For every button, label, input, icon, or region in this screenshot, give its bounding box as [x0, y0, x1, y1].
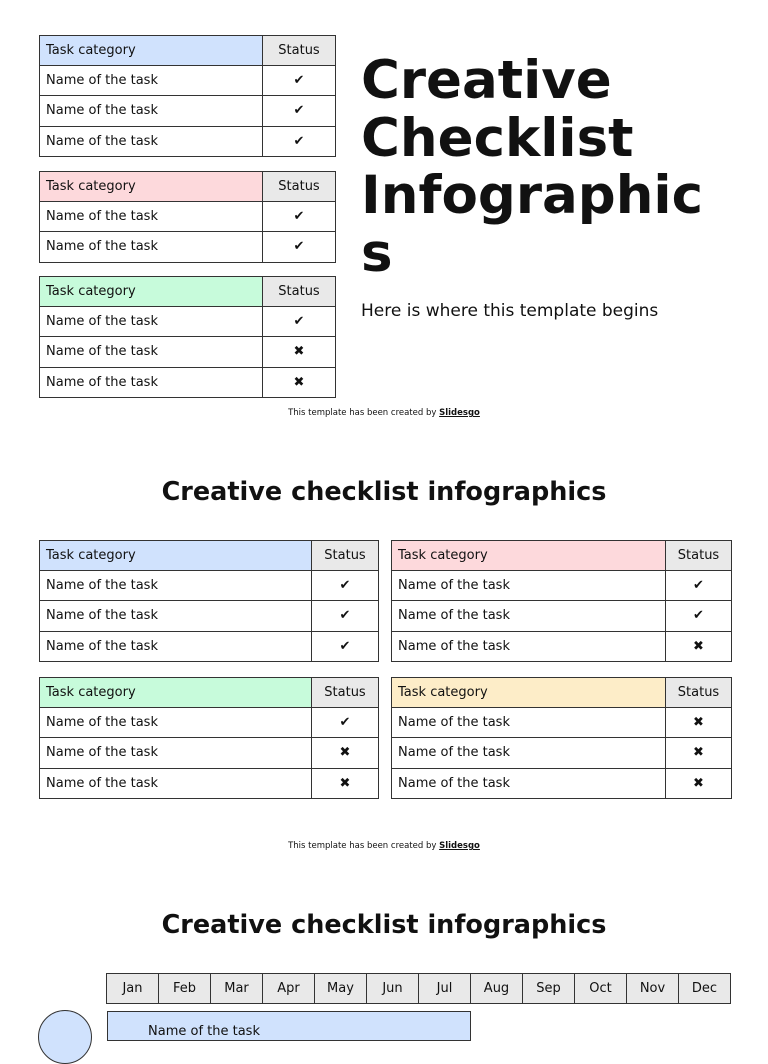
table: pink: Name of the task — [398, 639, 510, 654]
table: pink — [391, 540, 732, 662]
months row: Jun — [382, 981, 403, 996]
months row: Aug — [484, 981, 509, 996]
table: blue — [39, 540, 379, 662]
table: pink checklist: Status — [278, 179, 320, 194]
table: green: Name of the task — [46, 776, 158, 791]
table: blue checklist: Status — [278, 43, 320, 58]
table: green: Name of the task — [46, 715, 158, 730]
credit line 2: This template has been created by Slidesgo — [288, 841, 480, 851]
table: blue checklist — [39, 35, 336, 157]
months row: Sep — [536, 981, 561, 996]
table: yellow: ✖ — [693, 776, 704, 791]
table: blue checklist: Task category — [46, 43, 136, 58]
table: green checklist: ✔ — [294, 314, 304, 329]
table: blue: Name of the task — [46, 639, 158, 654]
table: green checklist: Task category — [46, 284, 136, 299]
months row: May — [327, 981, 354, 996]
table: green checklist: Name of the task — [46, 314, 158, 329]
table: green checklist: Name of the task — [46, 375, 158, 390]
table: blue checklist: ✔ — [294, 73, 304, 88]
table: yellow — [391, 677, 732, 799]
table: yellow: Name of the task — [398, 715, 510, 730]
months row: Oct — [589, 981, 612, 996]
table: yellow: ✖ — [693, 745, 704, 760]
table: pink checklist: Name of the task — [46, 209, 158, 224]
table: yellow: ✖ — [693, 715, 704, 730]
table: green checklist: Name of the task — [46, 344, 158, 359]
table: blue: Task category — [46, 548, 136, 563]
table: pink checklist: Task category — [46, 179, 136, 194]
table: pink checklist: Name of the task — [46, 239, 158, 254]
table: blue: Name of the task — [46, 578, 158, 593]
table: pink: Task category — [398, 548, 488, 563]
table: green: Name of the task — [46, 745, 158, 760]
table: green checklist: ✖ — [294, 375, 304, 390]
table: blue checklist: Name of the task — [46, 134, 158, 149]
subtitle: Here is where this template begins — [361, 301, 658, 321]
table: pink: Status — [678, 548, 719, 563]
table: yellow: Status — [678, 685, 719, 700]
timeline bar: Name of the task — [148, 1024, 260, 1039]
table: green checklist — [39, 276, 336, 398]
table: pink: Name of the task — [398, 578, 510, 593]
table: pink checklist — [39, 171, 336, 263]
table: blue: ✔ — [340, 608, 350, 623]
table: pink checklist: ✔ — [294, 239, 304, 254]
heading: section 2: Creative checklist infographics — [162, 477, 606, 507]
months row: Nov — [640, 981, 665, 996]
months row: Mar — [224, 981, 249, 996]
table: green — [39, 677, 379, 799]
table: green checklist: ✖ — [294, 344, 304, 359]
table: pink checklist: ✔ — [294, 209, 304, 224]
table: blue: ✔ — [340, 578, 350, 593]
heading: section 3: Creative checklist infographics — [162, 910, 606, 940]
table: green: ✖ — [340, 745, 350, 760]
table: green: Task category — [46, 685, 136, 700]
table: pink: ✖ — [693, 639, 704, 654]
credit line: This template has been created by Slidesgo — [288, 408, 480, 418]
table: pink: Name of the task — [398, 608, 510, 623]
months row: Feb — [173, 981, 196, 996]
table: green checklist: Status — [278, 284, 320, 299]
table: green: ✖ — [340, 776, 350, 791]
timeline bar — [107, 1011, 471, 1041]
table: yellow: Name of the task — [398, 745, 510, 760]
table: blue: Status — [324, 548, 366, 563]
title: Creative Checklist Infographic — [361, 50, 703, 226]
months row: Jul — [437, 981, 452, 996]
table: blue: Name of the task — [46, 608, 158, 623]
months row: Dec — [692, 981, 717, 996]
table: green: Status — [324, 685, 366, 700]
title: s — [361, 222, 393, 284]
table: blue checklist: ✔ — [294, 134, 304, 149]
table: blue checklist: Name of the task — [46, 103, 158, 118]
table: yellow: Task category — [398, 685, 488, 700]
table: blue checklist: ✔ — [294, 103, 304, 118]
table: pink: ✔ — [693, 608, 704, 623]
circle icon — [38, 1010, 92, 1064]
table: pink: ✔ — [693, 578, 704, 593]
table: blue: ✔ — [340, 639, 350, 654]
months row: Jan — [122, 981, 143, 996]
months row: Apr — [277, 981, 300, 996]
table: green: ✔ — [340, 715, 350, 730]
months row — [106, 973, 731, 1004]
table: yellow: Name of the task — [398, 776, 510, 791]
table: blue checklist: Name of the task — [46, 73, 158, 88]
